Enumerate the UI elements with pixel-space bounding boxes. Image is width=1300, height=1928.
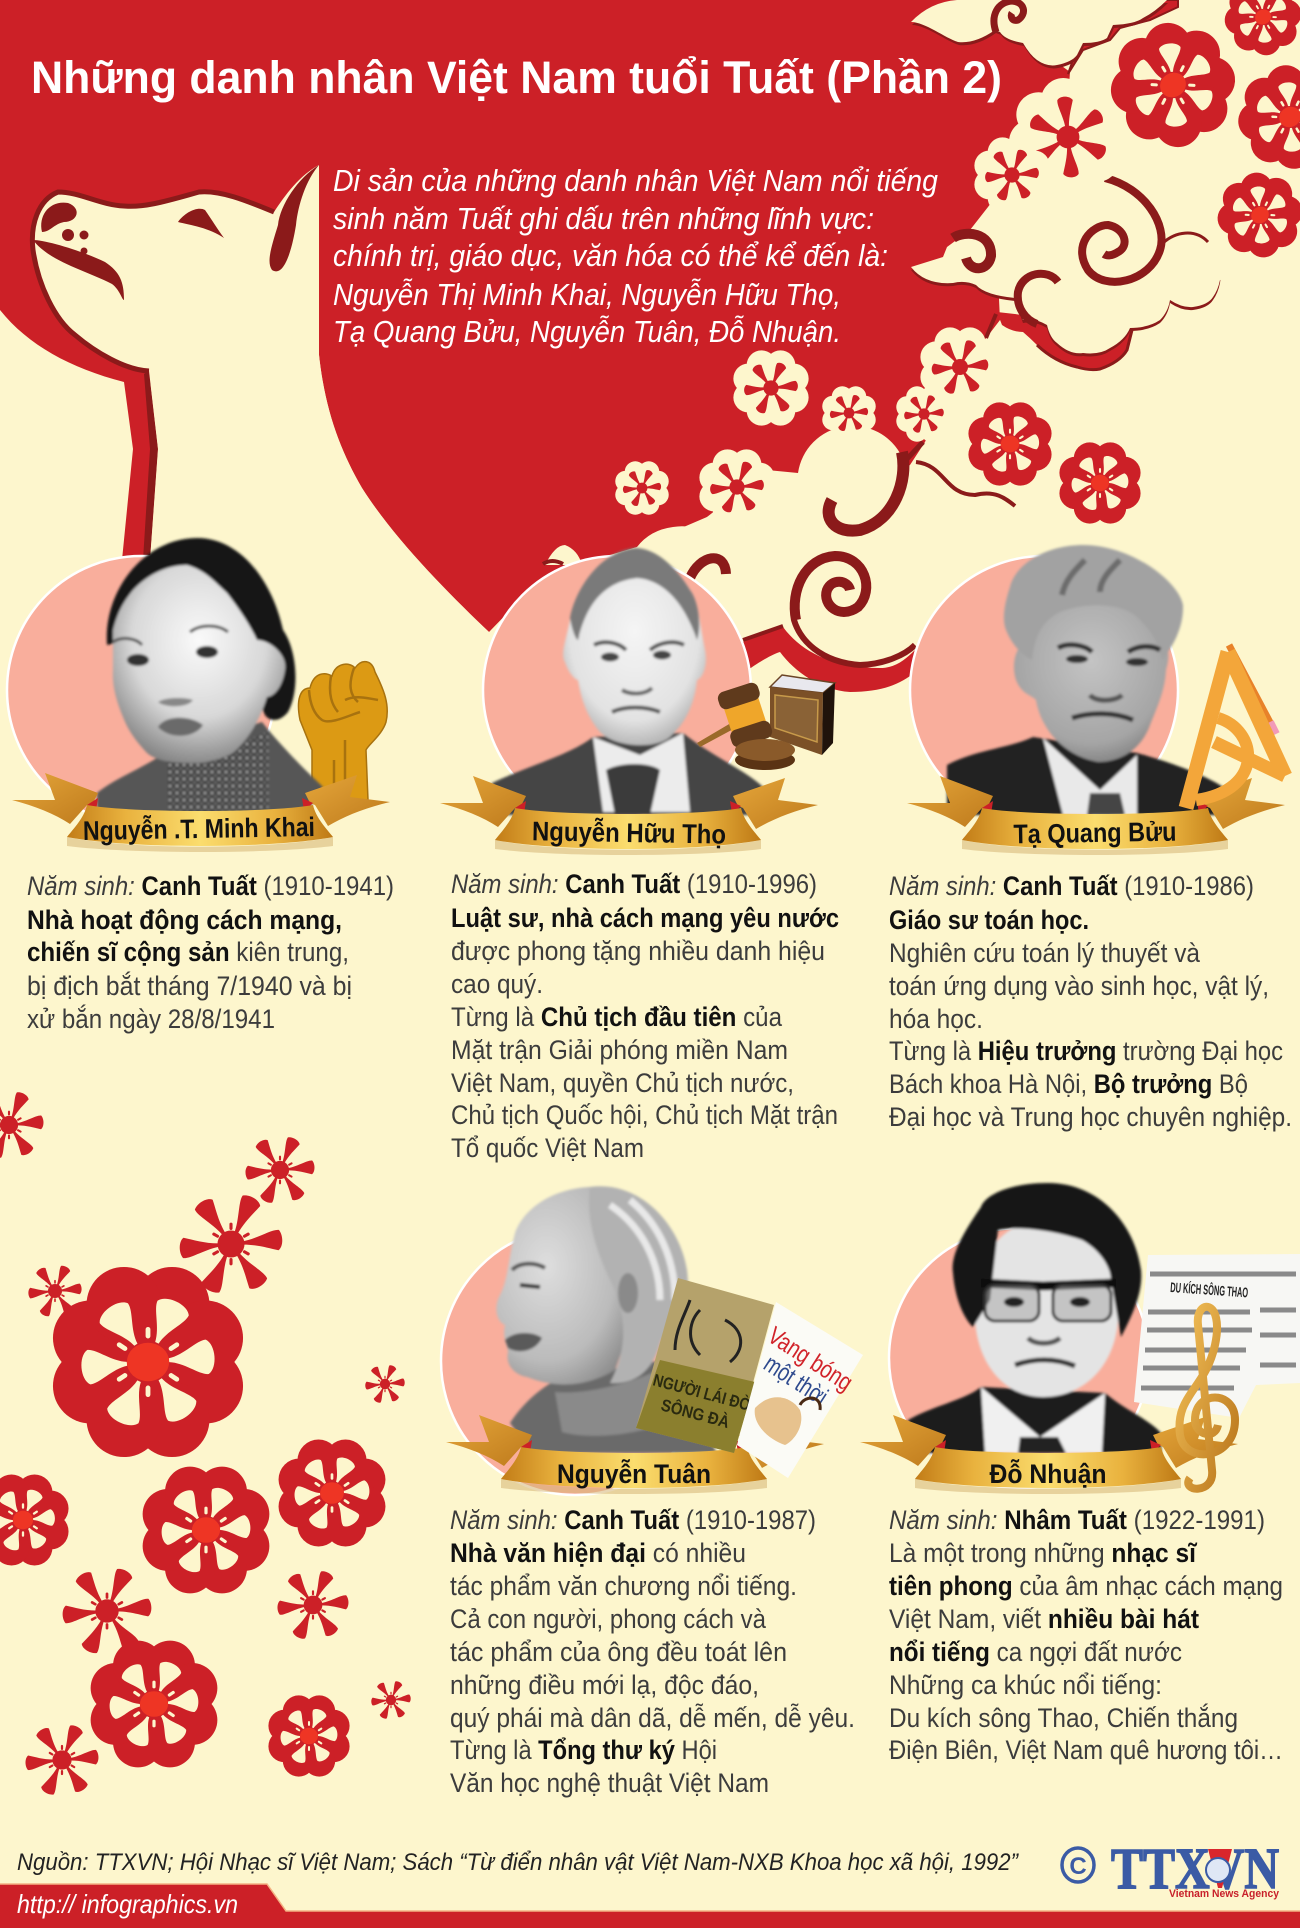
ribbon with name: Nguyễn .T. Minh Khai <box>83 811 315 846</box>
illustration: middle cloud <box>911 60 1300 370</box>
photo: Minh Khai <box>97 538 323 815</box>
text block: Nguyễn Tuân: tác phẩm văn chương nổi tiếng. <box>450 1571 797 1601</box>
ribbon with name: Đỗ Nhuận <box>990 1458 1106 1489</box>
text block: Hữu Thọ: Từng là Chủ tịch đầu tiên của <box>451 1002 783 1032</box>
icon: gavel <box>697 681 795 770</box>
text block: Đỗ Nhuận: Du kích sông Thao, Chiến thắng <box>889 1702 1238 1733</box>
photo: Nguyễn Tuân <box>496 1186 717 1453</box>
illustration: lower cloud with swirls <box>543 426 1015 692</box>
ribbon with name <box>907 776 1285 855</box>
icon: treble clef <box>1179 1307 1235 1489</box>
logo: TTXVN: Vietnam News Agency <box>1169 1888 1280 1900</box>
text block: Nguyễn Tuân: Văn học nghệ thuật Việt Nam <box>450 1768 769 1798</box>
panel: Nguyễn Tuân portrait <box>441 1186 863 1495</box>
icon: sheet music <box>1134 1254 1300 1418</box>
photo: Hữu Thọ <box>490 548 770 815</box>
text block: Minh Khai: chiến sĩ cộng sản kiên trung, <box>27 937 349 967</box>
text block: Nguyễn Tuân: quý phái mà dân dã, dễ mến, dễ yêu. <box>450 1702 855 1733</box>
text block: Đỗ Nhuận: nổi tiếng ca ngợi đất nước <box>889 1637 1182 1667</box>
text block: Đỗ Nhuận: Là một trong những nhạc sĩ <box>889 1538 1197 1568</box>
text block: Hữu Thọ <box>451 869 839 1163</box>
decorative flowers: top right cluster <box>615 0 1300 525</box>
icon: book Người lái đò sông Đà <box>636 1278 774 1453</box>
illustration: top right cloud <box>911 0 1178 74</box>
text block: Đỗ Nhuận: Việt Nam, viết nhiều bài hát <box>889 1604 1199 1634</box>
panel: Nguyễn Hữu Thọ portrait <box>440 548 835 855</box>
text block: Minh Khai: bị địch bắt tháng 7/1940 và bị <box>27 970 352 1001</box>
ribbon with name <box>860 1415 1238 1494</box>
photo: Quang Bửu <box>947 545 1230 815</box>
text block: Đỗ Nhuận: Những ca khúc nổi tiếng: <box>889 1670 1162 1700</box>
ribbon with name: Tạ Quang Bửu <box>1013 817 1177 849</box>
decorative flowers: lower left cluster <box>0 1091 411 1796</box>
text block: Hữu Thọ: Mặt trận Giải phóng miền Nam <box>451 1035 788 1065</box>
intro text block: Tạ Quang Bửu, Nguyễn Tuân, Đỗ Nhuận. <box>333 314 841 349</box>
text block: Minh Khai <box>27 871 394 1034</box>
panel: Đỗ Nhuận portrait <box>860 1183 1300 1494</box>
icon: dog mouth <box>33 240 124 300</box>
text block: Quang Bửu: hóa học. <box>889 1004 983 1034</box>
text block: Quang Bửu: Bách khoa Hà Nội, Bộ trưởng Bộ <box>889 1069 1248 1099</box>
panel: Nguyễn Thị Minh Khai portrait <box>7 538 390 852</box>
ribbon with name: Nguyễn Hữu Thọ <box>532 815 726 850</box>
icon: book Vang bóng một thời: Vang bóng <box>763 1322 858 1397</box>
text block: Quang Bửu: Từng là Hiệu trưởng trường Đại học <box>889 1036 1283 1066</box>
text block: Hữu Thọ: Luật sư, nhà cách mạng yêu nước <box>451 903 839 933</box>
text block: Minh Khai: Năm sinh: Canh Tuất (1910-1941) <box>27 871 394 901</box>
icon: book Người lái đò sông Đà: SÔNG ĐÀ <box>659 1396 731 1432</box>
footer bar: http:// infographics.vn <box>17 1889 238 1919</box>
icon: book Vang bóng một thời: một thời <box>759 1350 833 1411</box>
text block: Quang Bửu: Giáo sư toán học. <box>889 905 1089 935</box>
text block: Hữu Thọ: được phong tặng nhiều danh hiệu <box>451 936 825 966</box>
text block: Hữu Thọ: cao quý. <box>451 969 543 999</box>
text block: Hữu Thọ: Chủ tịch Quốc hội, Chủ tịch Mặt trận <box>451 1100 838 1130</box>
text block: Minh Khai: Nhà hoạt động cách mạng, <box>27 905 342 935</box>
icon: book Người lái đò sông Đà: NGƯỜI LÁI ĐÒ <box>651 1371 752 1415</box>
title: Những danh nhân Việt Nam tuổi Tuất (Phần 2) <box>31 52 1002 103</box>
text block: Nguyễn Tuân: những điều mới lạ, độc đáo, <box>450 1670 759 1700</box>
icon: dog eye <box>178 209 224 238</box>
ribbon with name <box>446 1415 824 1494</box>
intro text block: Nguyễn Thị Minh Khai, Nguyễn Hữu Thọ, <box>333 277 841 312</box>
icon: law book <box>770 675 835 755</box>
text block: Quang Bửu <box>889 871 1292 1132</box>
text block: Hữu Thọ: Năm sinh: Canh Tuất (1910-1996) <box>451 869 817 899</box>
panel: red header shape <box>0 0 1070 632</box>
icon: raised fist <box>298 662 387 800</box>
source note: Nguồn: TTXVN; Hội Nhạc sĩ Việt Nam; Sách “Từ điển nhân vật Việt Nam-NXB Khoa học xã hội, 1992” <box>17 1849 1019 1876</box>
text block: Nguyễn Tuân: tác phẩm của ông đều toát lên <box>450 1637 787 1667</box>
icon: dog ear <box>270 165 319 271</box>
intro text block: chính trị, giáo dục, văn hóa có thể kể đến là: <box>333 238 888 273</box>
text block: Nguyễn Tuân: Cả con người, phong cách và <box>450 1604 767 1634</box>
text block: Quang Bửu: Nghiên cứu toán lý thuyết và <box>889 938 1201 968</box>
photo: Đỗ Nhuận <box>908 1183 1161 1453</box>
intro text block: Di sản của những danh nhân Việt Nam nổi tiếng <box>333 163 938 198</box>
text block: Hữu Thọ: Việt Nam, quyền Chủ tịch nước, <box>451 1068 794 1098</box>
illustration: dog silhouette <box>32 165 489 632</box>
icon: ruler and set square <box>1186 645 1285 808</box>
intro text block: sinh năm Tuất ghi dấu trên những lĩnh vực: <box>333 201 874 236</box>
text block: Quang Bửu: toán ứng dụng vào sinh học, vật lý, <box>889 971 1269 1001</box>
panel: Tạ Quang Bửu portrait <box>907 545 1285 855</box>
icon: dog nostril and spots <box>41 203 88 254</box>
text block: Nguyễn Tuân: Năm sinh: Canh Tuất (1910-1987) <box>450 1505 816 1535</box>
text block: Đỗ Nhuận: Năm sinh: Nhâm Tuất (1922-1991) <box>889 1505 1265 1535</box>
icon: book Vang bóng một thời <box>737 1302 863 1478</box>
text block: Nguyễn Tuân: Từng là Tổng thư ký Hội <box>450 1735 717 1765</box>
ribbon with name: Nguyễn Tuân <box>557 1458 711 1489</box>
text block: Đỗ Nhuận <box>889 1505 1283 1765</box>
text block: Nguyễn Tuân <box>450 1505 855 1798</box>
footer bar <box>0 1884 1300 1928</box>
text block: Minh Khai: xử bắn ngày 28/8/1941 <box>27 1003 275 1034</box>
logo: TTXVN: C <box>1069 1853 1087 1880</box>
intro text block <box>333 163 938 349</box>
text block: Hữu Thọ: Tổ quốc Việt Nam <box>451 1133 644 1163</box>
ribbon with name <box>440 776 818 855</box>
text block: Nguyễn Tuân: Nhà văn hiện đại có nhiều <box>450 1538 746 1568</box>
text block: Quang Bửu: Năm sinh: Canh Tuất (1910-1986) <box>889 871 1254 901</box>
ribbon with name <box>12 773 390 852</box>
